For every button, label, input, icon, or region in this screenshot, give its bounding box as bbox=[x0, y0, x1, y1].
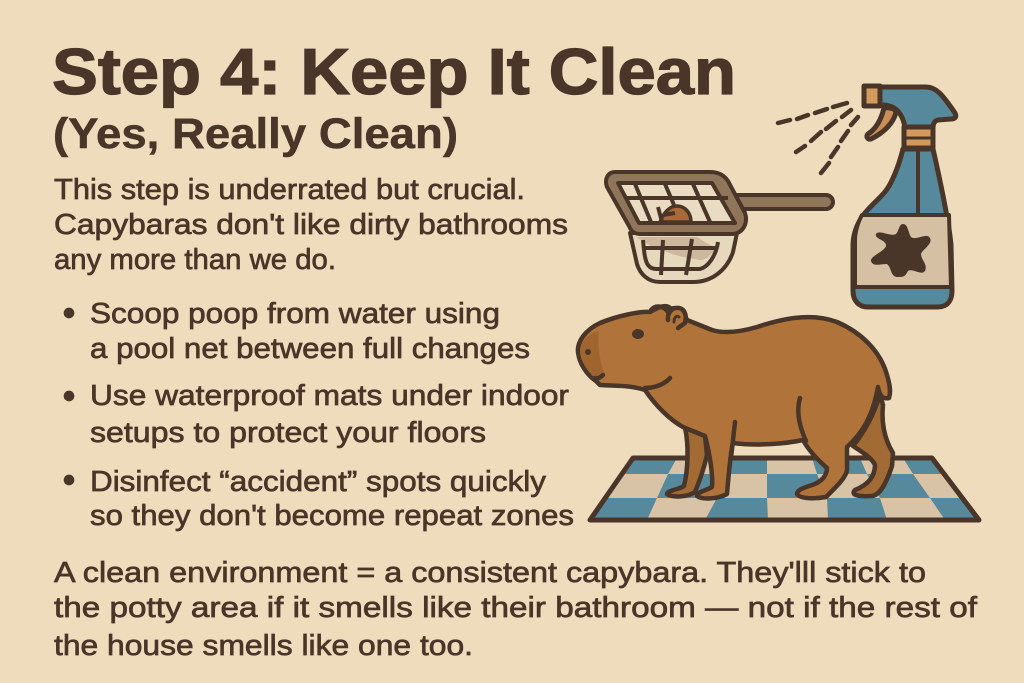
closing paragraph bbox=[54, 557, 978, 662]
closing paragraph: the house smells like one too. bbox=[54, 630, 473, 662]
capybara bbox=[578, 306, 893, 498]
bullet list bbox=[64, 298, 574, 532]
title: Step 4: Keep It Clean bbox=[52, 35, 736, 108]
muzzle shading bbox=[580, 331, 604, 379]
icon: spray mist bbox=[778, 103, 858, 173]
intro text: any more than we do. bbox=[54, 244, 336, 276]
icon: stain on label bbox=[871, 224, 931, 277]
far legs bbox=[667, 428, 707, 496]
mouth bbox=[595, 375, 670, 388]
intro text: This step is underrated but crucial. bbox=[54, 174, 525, 206]
body contour lines bbox=[731, 398, 806, 458]
body bbox=[578, 306, 890, 498]
closing paragraph: A clean environment = a consistent capybara. They'lll stick to bbox=[54, 557, 926, 589]
checkered mat bbox=[590, 458, 979, 520]
bullet list: setups to protect your floors bbox=[90, 417, 486, 449]
eye bbox=[632, 329, 644, 339]
subtitle: (Yes, Really Clean) bbox=[53, 110, 458, 158]
bullet list: Disinfect “accident” spots quickly bbox=[90, 466, 547, 498]
poop in net bbox=[660, 206, 691, 222]
icon: pool net bbox=[606, 172, 833, 282]
intro text: Capybaras don't like dirty bathrooms bbox=[54, 209, 568, 241]
bullet list: Scoop poop from water using bbox=[90, 298, 500, 330]
nostril bbox=[585, 349, 591, 355]
bullet list: Use waterproof mats under indoor bbox=[90, 380, 569, 412]
ear bbox=[668, 308, 686, 328]
bullet list: so they don't become repeat zones bbox=[90, 500, 574, 532]
intro text bbox=[54, 174, 568, 276]
closing paragraph: the potty area if it smells like their bathroom — not if the rest of bbox=[54, 592, 978, 624]
title bbox=[52, 35, 736, 158]
bullet list: a pool net between full changes bbox=[90, 333, 530, 365]
icon: spray bottle bbox=[853, 86, 956, 307]
